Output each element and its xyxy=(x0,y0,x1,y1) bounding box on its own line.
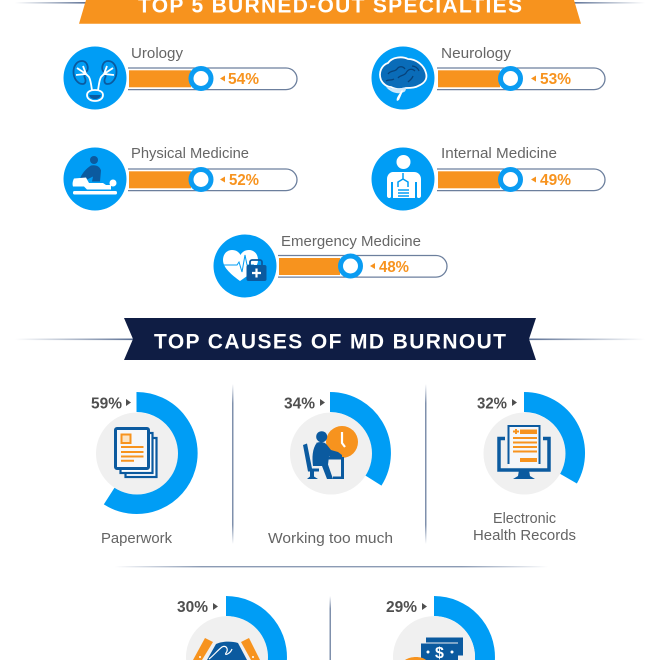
panel: physical medicine xyxy=(64,146,297,210)
panel: neurology xyxy=(372,46,605,110)
panel: internal medicine: Internal Medicine xyxy=(441,146,557,162)
panel: paperwork 59%: 59% xyxy=(91,396,122,412)
heading: top causes of md burnout xyxy=(124,318,536,360)
icon: heart and medical case xyxy=(214,234,276,298)
panel: working too much 34%: 34% xyxy=(284,396,315,412)
progress bar: 53%: 53% xyxy=(540,71,571,88)
panel: internal medicine xyxy=(372,146,605,210)
panel: neurology: Neurology xyxy=(441,46,512,62)
progress bar: 52% xyxy=(128,169,297,191)
heading: top causes of md burnout: TOP CAUSES OF MD BURNOUT xyxy=(154,330,506,354)
progress bar: 52%: 52% xyxy=(229,172,259,189)
progress bar: 49% xyxy=(437,169,605,191)
icon: worker at desk with clock xyxy=(303,426,358,479)
label: electronic health records: Electronic xyxy=(493,511,556,527)
label: electronic health records xyxy=(473,511,576,544)
icon: massage therapist xyxy=(64,148,126,210)
panel: cause 29%: 29% xyxy=(386,599,417,616)
donut chart: 29% xyxy=(393,596,495,660)
progress bar: 54% xyxy=(128,68,297,90)
panel: paperwork 59%: Paperwork xyxy=(101,531,173,547)
progress bar: 48%: 48% xyxy=(379,259,409,276)
panel: paperwork 59% xyxy=(91,396,188,547)
panel: electronic health records 32%: 32% xyxy=(477,396,507,412)
icon: monitor with health record xyxy=(499,426,549,479)
panel: emergency medicine: Emergency Medicine xyxy=(281,234,421,250)
progress bar: 53% xyxy=(437,68,605,90)
panel: cause 29% xyxy=(386,596,495,660)
panel: physical medicine: Physical Medicine xyxy=(131,146,249,162)
panel: working too much 34%: Working too much xyxy=(268,531,393,547)
panel: urology xyxy=(64,46,297,110)
heading: top 5 burned-out specialties xyxy=(79,0,581,24)
donut chart: 32% xyxy=(484,402,575,494)
icon: kidneys xyxy=(64,46,126,110)
icon: brain xyxy=(372,46,434,110)
label: electronic health records: Health Records xyxy=(473,528,576,544)
icon: torso organs xyxy=(372,148,434,210)
donut chart: 30% xyxy=(186,596,287,660)
panel: cause 30%: 30% xyxy=(177,599,208,616)
panel: emergency medicine xyxy=(214,234,447,298)
panel: cause 30% xyxy=(177,596,287,660)
donut chart: 59% xyxy=(96,402,188,504)
panel: urology: Urology xyxy=(131,46,184,62)
icon: handshake xyxy=(193,638,260,660)
icon: stacked documents xyxy=(116,428,156,477)
progress bar: 48% xyxy=(278,256,447,277)
panel: working too much 34% xyxy=(268,396,393,547)
progress bar: 49%: 49% xyxy=(540,172,571,189)
donut chart: 34% xyxy=(290,402,381,494)
progress bar: 54%: 54% xyxy=(228,71,259,88)
panel: electronic health records 32% xyxy=(473,396,576,544)
